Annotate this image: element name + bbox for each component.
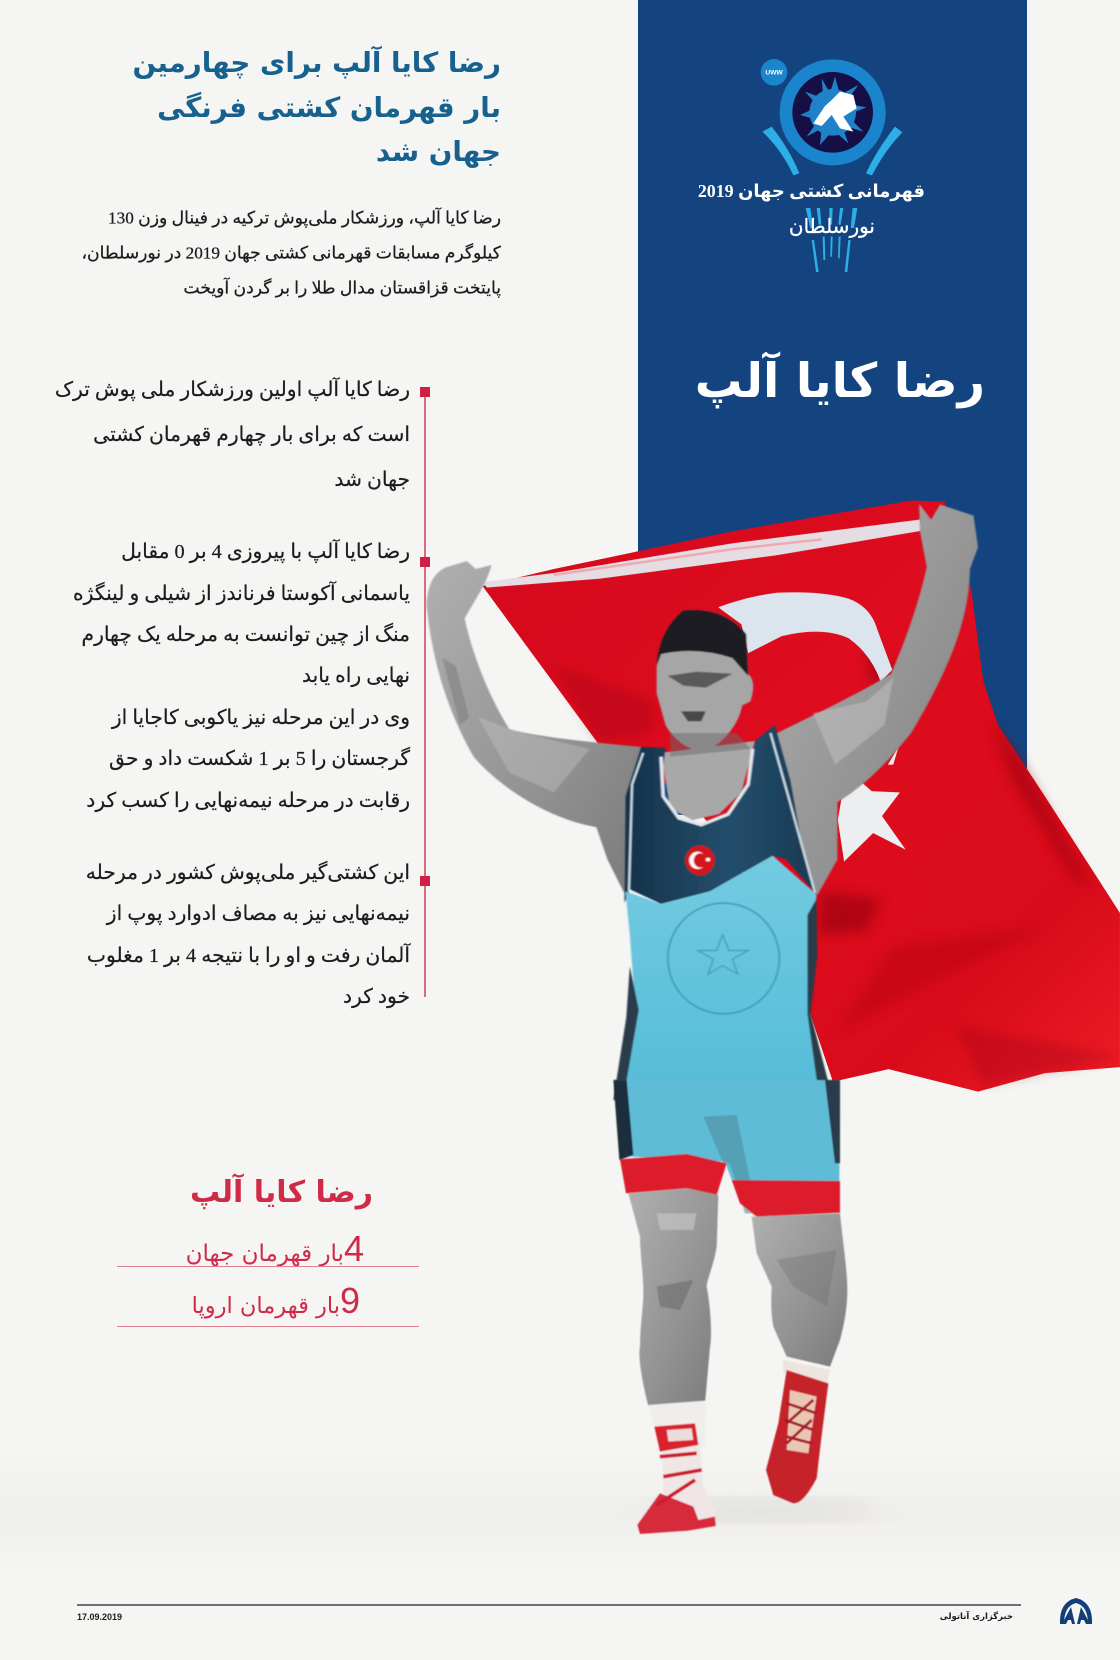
singlet flag badge bbox=[685, 845, 715, 875]
intro text bbox=[82, 207, 502, 298]
singlet blue body bbox=[614, 856, 833, 1100]
singlet dark top bbox=[624, 725, 816, 904]
icon: wrestlers bbox=[813, 92, 857, 132]
floor shadow bbox=[0, 1450, 1120, 1570]
text block: second point: منگ از چین توانست به مرحله یک چهارم bbox=[82, 624, 410, 646]
heading: بار قهرمان کشتی فرنگی bbox=[157, 91, 501, 124]
text block: second point: رضا کایا آلپ با پیروزی 4 بر 0 مقابل bbox=[121, 541, 410, 563]
record row: europe: 9بار قهرمان اروپا bbox=[192, 1280, 360, 1321]
text block: third point: آلمان رفت و او را با نتیجه 4 بر 1 مغلوب bbox=[87, 945, 410, 967]
record panel bbox=[117, 1173, 419, 1327]
right sock bbox=[783, 1360, 830, 1387]
footer rule bbox=[77, 1604, 1021, 1606]
intro text: کیلوگرم مسابقات قهرمانی کشتی جهان 2019 در نورسلطان، bbox=[82, 243, 501, 262]
text block: first point bbox=[55, 376, 410, 492]
icon: ring bbox=[786, 66, 879, 159]
icon: side arcs and rays bbox=[762, 127, 902, 272]
text block: third point: نیمه‌نهایی نیز به مصاف ادوارد پوپ از bbox=[107, 903, 410, 925]
date: 17.09.2019 bbox=[77, 1612, 122, 1622]
text block: second point: رقابت در مرحله نیمه‌نهایی را کسب کرد bbox=[86, 790, 410, 812]
icon: uww badge bbox=[761, 59, 787, 86]
left sock bbox=[648, 1401, 706, 1447]
record row: world: 4بار قهرمان جهان bbox=[186, 1228, 364, 1269]
left shoe bbox=[637, 1423, 716, 1534]
text block: third point bbox=[86, 860, 411, 1008]
flag hem bbox=[482, 520, 922, 588]
right shoe bbox=[766, 1370, 828, 1503]
star bbox=[838, 782, 906, 862]
wrestler upper body bbox=[427, 504, 978, 1100]
left arm and hand bbox=[427, 561, 641, 895]
athlete name: رضا کایا آلپ bbox=[695, 354, 985, 409]
logo: world wrestling championship bbox=[760, 59, 902, 272]
text block: second point bbox=[73, 538, 410, 812]
icon: burst bbox=[800, 77, 867, 145]
intro text: پایتخت قزاقستان مدال طلا را بر گردن آویخت bbox=[183, 278, 501, 297]
left shorts band bbox=[620, 1154, 727, 1195]
heading bbox=[132, 46, 501, 168]
text block: third point: این کشتی‌گیر ملی‌پوش کشور در مرحله bbox=[86, 862, 410, 884]
record name: رضا کایا آلپ bbox=[190, 1175, 373, 1210]
flag folds bbox=[554, 646, 1120, 1085]
text block: first point: رضا کایا آلپ اولین ورزشکار ملی پوش ترک bbox=[55, 379, 410, 401]
text block: second point: نهایی راه یابد bbox=[302, 665, 410, 687]
text block: third point: خود کرد bbox=[343, 986, 410, 1008]
floor shadows bbox=[640, 1498, 880, 1522]
logo caption bbox=[698, 181, 925, 238]
wrestler lower body bbox=[613, 1080, 847, 1534]
text block: second point: وی در این مرحله نیز یاکوبی کاجایا از bbox=[112, 707, 410, 729]
blue panel bbox=[638, 0, 1027, 815]
flag bbox=[482, 501, 1120, 1092]
crescent bbox=[718, 592, 892, 682]
head bbox=[657, 610, 753, 753]
right shorts band bbox=[732, 1180, 840, 1217]
logo caption: قهرمانی کشتی جهان 2019 bbox=[698, 181, 925, 201]
intro text: رضا کایا آلپ، ورزشکار ملی‌پوش ترکیه در فینال وزن 130 bbox=[108, 208, 501, 227]
text block: second point: یاسمانی آکوستا فرناندز از شیلی و لینگژه bbox=[73, 583, 410, 605]
timeline line and markers bbox=[420, 387, 430, 997]
right arm and hand bbox=[777, 504, 978, 895]
icon: agency logo bbox=[1060, 1598, 1092, 1624]
text block: first point: است که برای بار چهارم قهرمان کشتی bbox=[93, 424, 410, 446]
left leg bbox=[628, 1188, 718, 1406]
text block: second point: گرجستان را 5 بر 1 شکست داد و حق bbox=[109, 748, 410, 770]
shorts bbox=[615, 1080, 840, 1182]
chest bbox=[661, 741, 755, 820]
agency name: خبرگزاری آناتولی bbox=[940, 1612, 1013, 1622]
heading: جهان شد bbox=[376, 135, 501, 168]
icon: uww badge: UWW bbox=[765, 70, 783, 77]
text block: first point: جهان شد bbox=[334, 469, 410, 491]
logo caption: نورسلطان bbox=[789, 216, 875, 238]
right leg bbox=[752, 1213, 847, 1367]
heading: رضا کایا آلپ برای چهارمین bbox=[132, 46, 501, 79]
